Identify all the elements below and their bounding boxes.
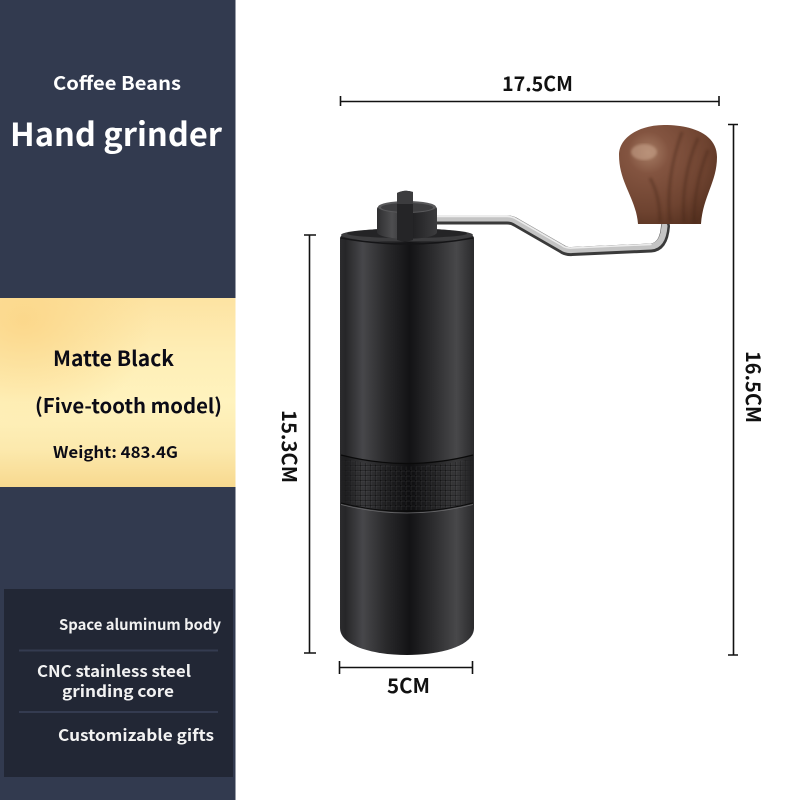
text: feature body material: Space aluminum body [59, 614, 221, 635]
knurled grip ring [341, 455, 473, 513]
text: feature gifts: Customizable gifts [58, 722, 214, 746]
text: feature grinding core: CNC stainless steel [37, 658, 191, 682]
text: weight: Weight: 483.4G [53, 439, 178, 463]
dimension: total width 17.5CM [340, 68, 719, 106]
panel: sidebar background [0, 0, 236, 800]
dimension: total width 17.5CM: 17.5CM [502, 68, 573, 97]
heading: product title: Hand grinder [10, 110, 222, 156]
text: feature grinding core: grinding core [62, 678, 174, 702]
heading: product title: Coffee Beans [53, 69, 181, 96]
dimension: body height 15.3CM [276, 235, 316, 653]
wooden knob [619, 125, 717, 224]
panel: gold model info [0, 298, 236, 487]
text: model name: (Five-tooth model) [35, 390, 222, 419]
heading: product title [10, 69, 222, 156]
handle arm [436, 216, 666, 252]
panel: feature list [4, 589, 233, 777]
dimension: body width 5CM: 5CM [387, 670, 430, 699]
illustration: hand grinder [340, 125, 717, 655]
text: feature grinding core [37, 658, 191, 702]
text: colour name: Matte Black [53, 343, 174, 373]
dimension: body width 5CM [339, 661, 473, 699]
adjustment cap [377, 191, 437, 242]
body cylinder [340, 228, 474, 655]
dimension: body height 15.3CM: 15.3CM [276, 410, 305, 483]
dimension: total height 16.5CM [728, 124, 769, 655]
dimension: total height 16.5CM: 16.5CM [740, 351, 769, 423]
